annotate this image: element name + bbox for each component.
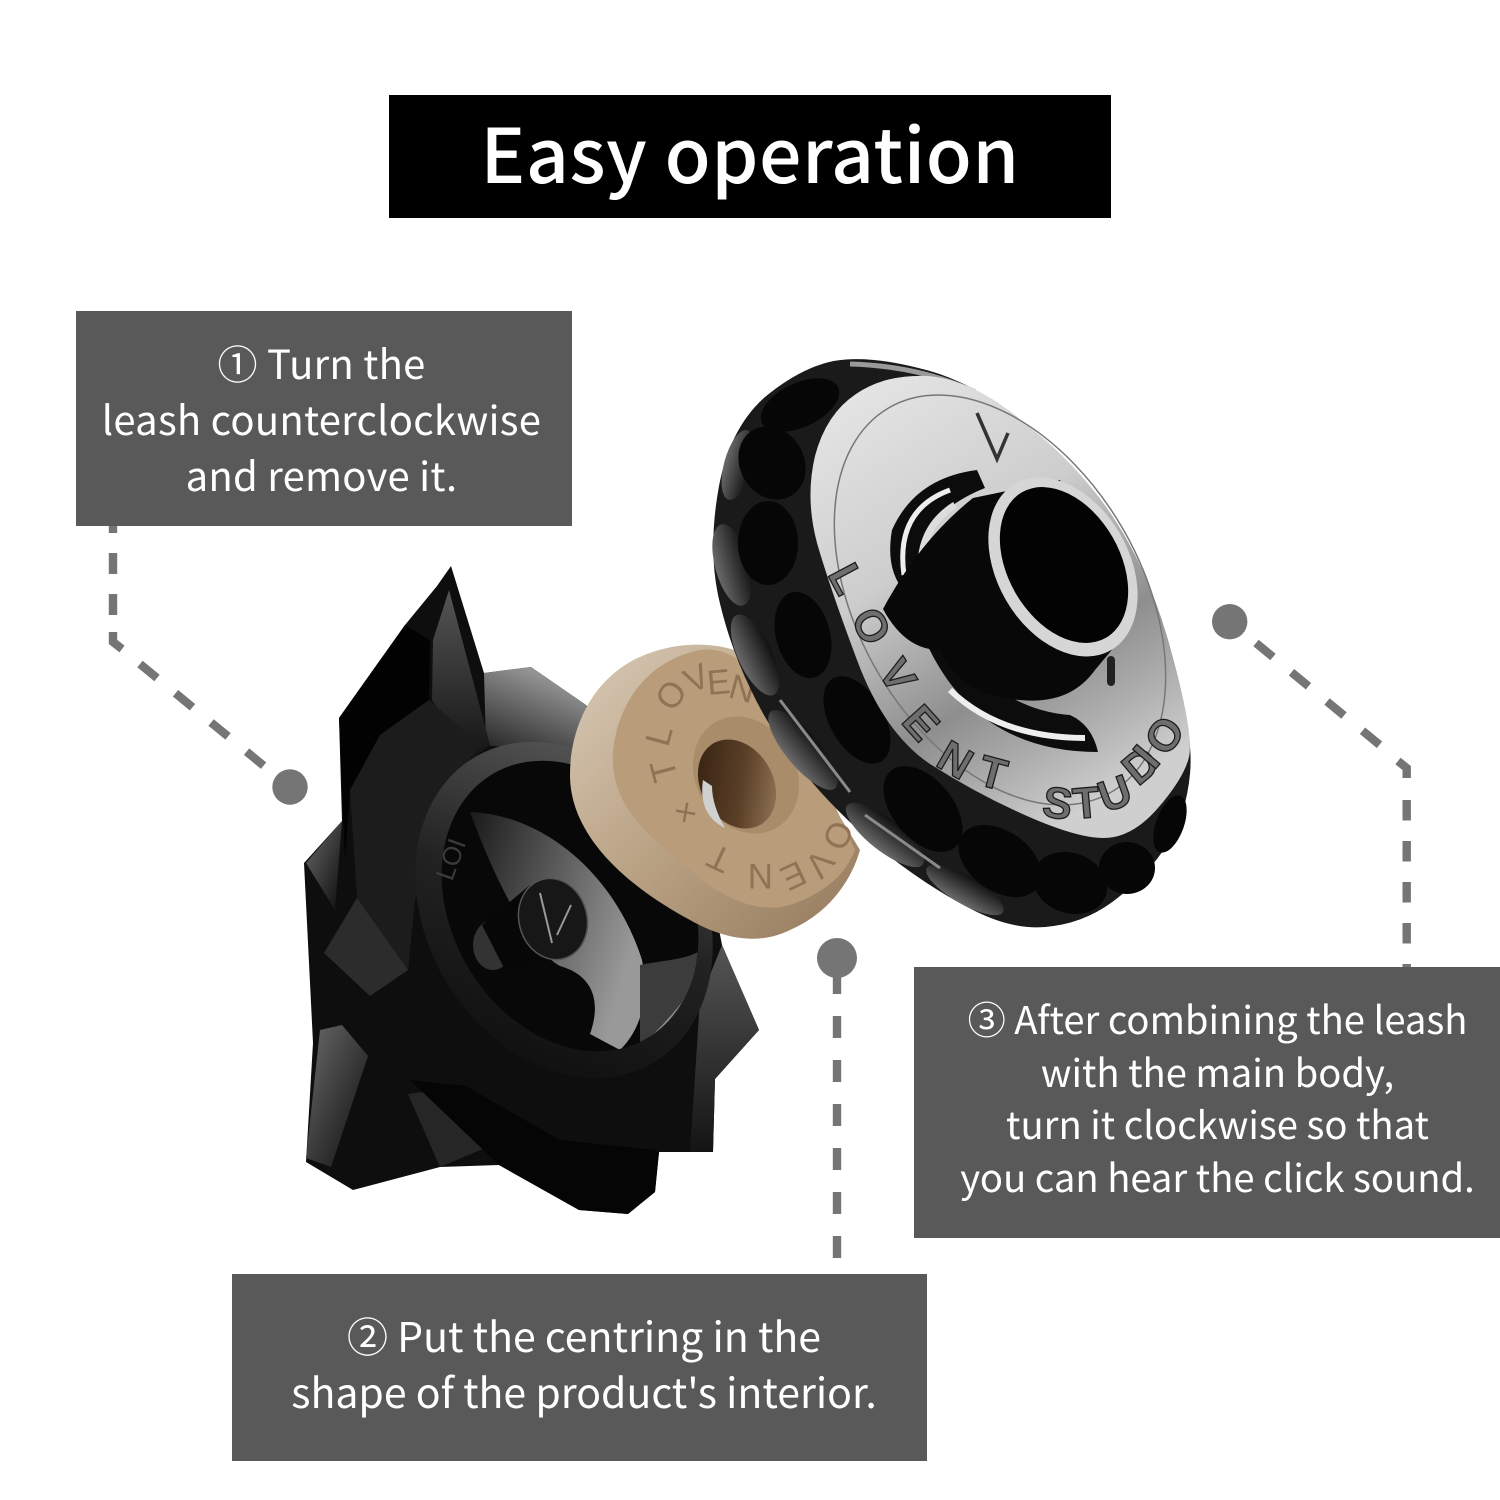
wolf head body xyxy=(304,566,772,1214)
callout: step 2 xyxy=(232,1274,927,1461)
connector: step 2 xyxy=(817,938,857,1258)
wolf socket xyxy=(416,742,713,1062)
disc chevron mark xyxy=(977,413,1008,459)
ring lettering: OVENT×T xyxy=(643,755,861,898)
ring lettering: LOVEN xyxy=(638,656,759,750)
metal disc xyxy=(705,337,1234,927)
connector: step 1 xyxy=(113,512,308,805)
callout: step 3 xyxy=(914,967,1500,1238)
callout: step 1: ① Turn the xyxy=(217,333,426,391)
title xyxy=(389,95,1111,218)
disc slots xyxy=(890,470,1111,752)
disc centre tube xyxy=(883,451,1168,701)
callout: step 1: and remove it. xyxy=(186,445,457,503)
callout: step 1: leash counterclockwise xyxy=(102,389,541,447)
disc rim scales xyxy=(705,364,1193,924)
socket peg xyxy=(473,871,596,970)
title: Easy operation xyxy=(480,96,1020,205)
disc lettering: LOVENT STUDIO xyxy=(818,556,1195,830)
callout: step 1 xyxy=(76,311,572,526)
illustration: product and connectors xyxy=(108,359,1411,1258)
callout: step 3: ③ After combining the leash xyxy=(968,991,1467,1046)
connector: step 3 xyxy=(1212,604,1407,967)
disc metal face xyxy=(810,376,1190,838)
callout: step 3: you can hear the click sound. xyxy=(960,1148,1475,1204)
callout: step 3: with the main body, xyxy=(1041,1044,1394,1098)
callout: step 2: ② Put the centring in the xyxy=(347,1304,821,1364)
centring ring xyxy=(570,645,861,939)
callout: step 2: shape of the product's interior. xyxy=(291,1360,877,1420)
socket lettering: LOI xyxy=(429,834,472,884)
ring lettering xyxy=(638,656,861,898)
callout: step 3: turn it clockwise so that xyxy=(1006,1096,1429,1151)
